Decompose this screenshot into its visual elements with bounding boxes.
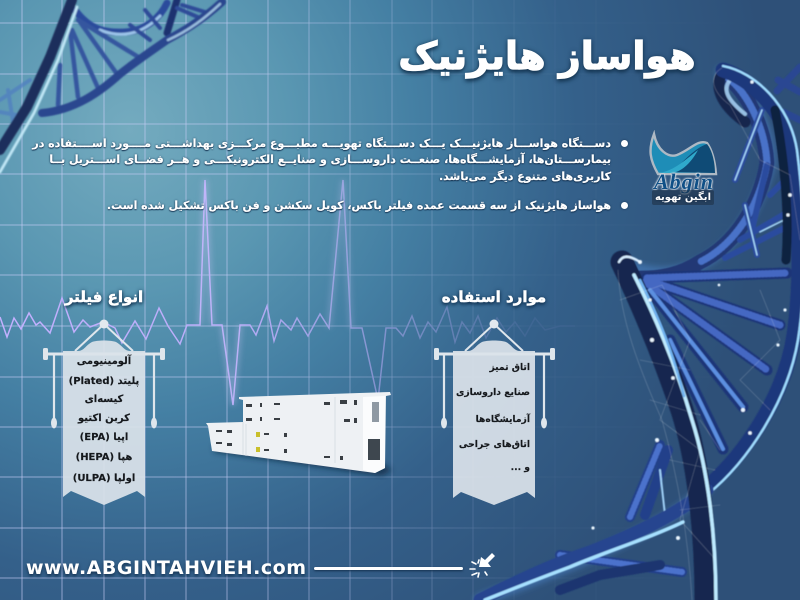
paragraph 1 line 2: بیمارســـتان‌ها، آزمایشـــگاه‌ها، صنعــت داروســـازی و صنایــع الکترونیکـــی و هــر فضــای اســـتریل بــا — [49, 153, 611, 166]
footer divider line — [314, 567, 463, 570]
filter item 3: کیسه‌ای — [85, 394, 123, 405]
filter item 5: اپیا (EPA) — [80, 432, 128, 443]
paragraph 1 line 3: کاربری‌های متنوع دیگر می‌باشد. — [439, 170, 611, 183]
logo wave mark — [649, 130, 718, 176]
illustration: air handling unit — [206, 392, 392, 478]
filter item 4: کربن اکتیو — [78, 413, 130, 424]
banner: applications list — [434, 320, 555, 505]
logo: Abgin Tahvieh — [649, 130, 718, 205]
application item 4: اتاق‌های جراحی — [459, 439, 530, 450]
application item 5: و ... — [511, 462, 530, 473]
title: هواساز هایژنیک — [398, 34, 696, 78]
paragraph 2: هواساز هایژنیک از سه قسمت عمده فیلتر باکس، کویل سکشن و فن باکس تشکیل شده است. — [107, 199, 611, 212]
application item 3: آزمایشگاه‌ها — [476, 414, 530, 425]
logo caption — [652, 190, 714, 205]
footer website address: www.ABGINTAHVIEH.com — [26, 557, 306, 579]
illustration: DNA helix top left — [0, 0, 227, 174]
banner: filter types list — [43, 320, 165, 505]
heading: filter types: انواع فیلتر — [65, 288, 143, 306]
filter item 7: اولپا (ULPA) — [73, 473, 135, 484]
filter item 1: آلومینیومی — [77, 356, 131, 367]
filter item 6: هپا (HEPA) — [76, 452, 132, 463]
logo wordmark: Abgin — [654, 169, 714, 194]
heading: applications: موارد استفاده — [442, 288, 546, 306]
bullet 2 — [621, 202, 628, 209]
illustration: large DNA helix right side — [472, 62, 800, 600]
text block: introduction — [30, 136, 629, 214]
bullet 1 — [621, 140, 628, 147]
filter item 2: پلیتد (Plated) — [69, 376, 139, 387]
application item 2: صنایع داروسازی — [456, 387, 530, 398]
icon: click cursor — [469, 553, 495, 578]
application item 1: اتاق تمیز — [489, 362, 530, 373]
logo caption: ابگین تهویه — [655, 192, 711, 203]
paragraph 1 line 1: دســـتگاه هواســـاز هایژنیـــک یـــک دســـتگاه تهویـــه مطبـــوع مرکـــزی بهداشـــتی مــــورد اســــتفاده در — [32, 137, 611, 150]
